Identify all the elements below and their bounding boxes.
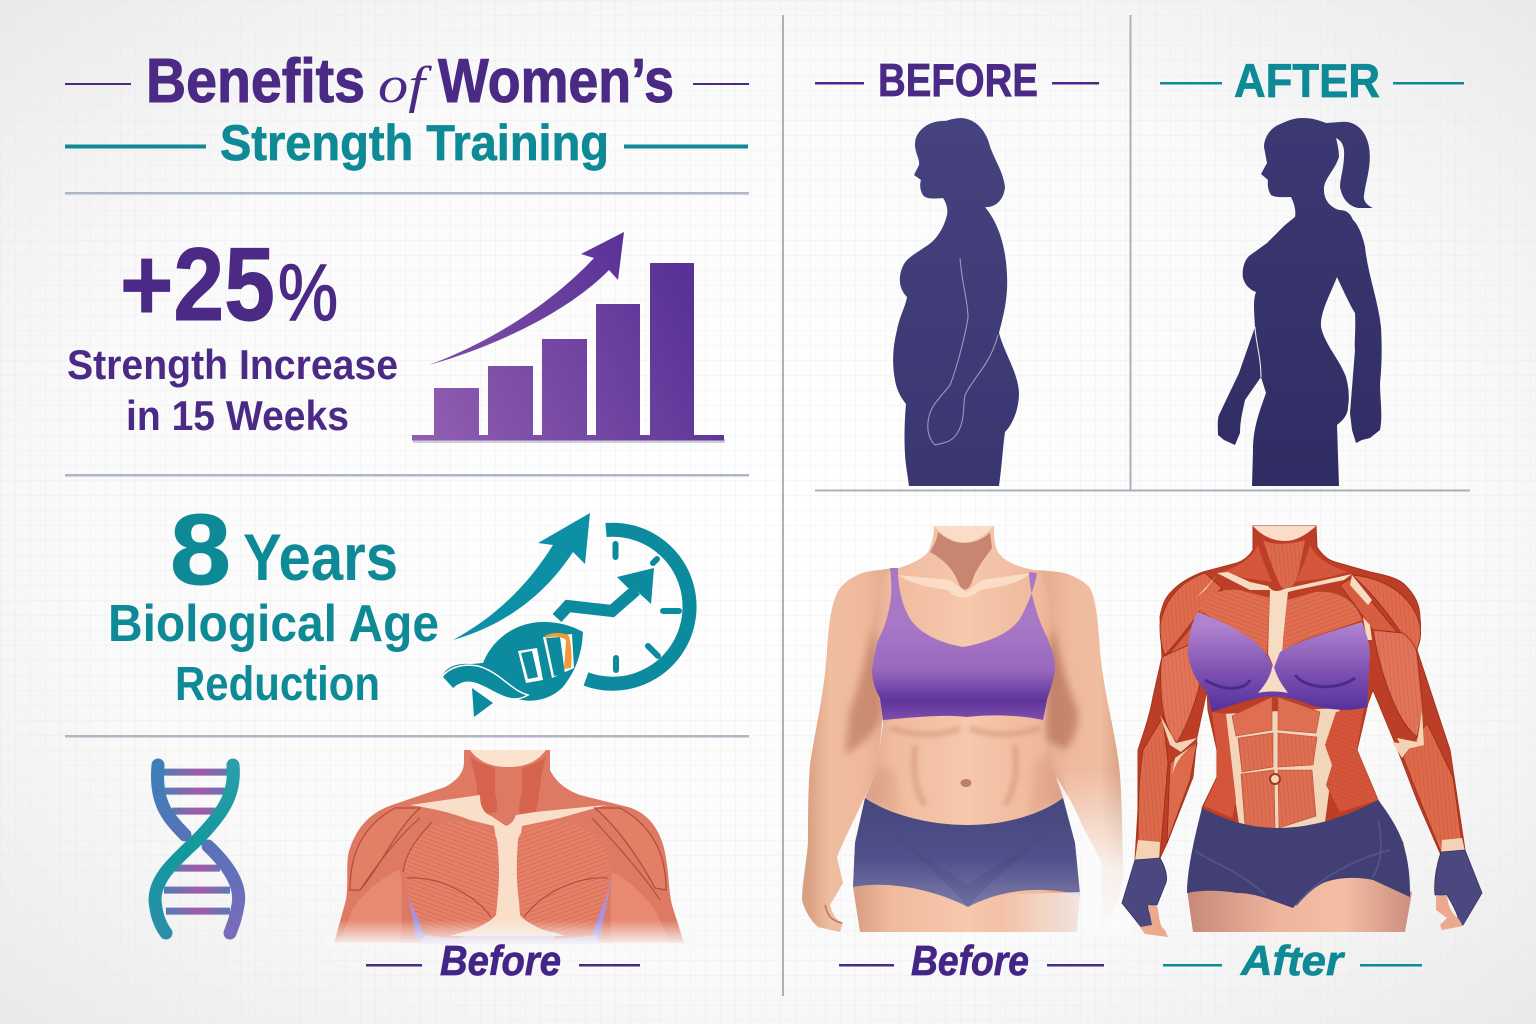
sports bra <box>1188 612 1370 712</box>
waist shading <box>865 750 1063 815</box>
chin cut <box>934 526 994 542</box>
bottom fade <box>325 920 695 946</box>
stat: +25% strength increase: Strength Increase <box>67 341 398 388</box>
collar and sternum tendons <box>1217 572 1352 672</box>
biceps <box>1161 643 1201 743</box>
label: before (body): Before <box>911 937 1029 984</box>
DNA leaf <box>442 622 583 701</box>
neck skin <box>470 750 546 767</box>
deltoids <box>1160 573 1222 655</box>
right arm and shoulder <box>1036 570 1123 930</box>
muscle base <box>1135 526 1465 860</box>
label: before (chest): Before <box>440 937 561 984</box>
label: after (body): After <box>1240 937 1346 984</box>
shorts <box>1187 800 1410 908</box>
figure: chest muscles before <box>325 750 695 946</box>
stat: 8 years biological age reduction <box>108 494 439 711</box>
abs fibers <box>1238 733 1317 828</box>
neck shading <box>930 532 992 590</box>
arrow: small <box>617 568 654 604</box>
bra tan cut-out <box>1258 662 1288 693</box>
abs <box>1232 697 1320 828</box>
left arm and shoulder <box>802 568 892 932</box>
neck skin <box>1253 526 1316 541</box>
rib and abs shading <box>890 728 1040 805</box>
navel <box>960 779 972 787</box>
panel: left column dividers <box>65 192 749 738</box>
DNA base pairs <box>518 648 543 683</box>
navel <box>1270 774 1280 784</box>
obliques <box>1204 712 1236 818</box>
sports bra <box>872 568 1055 720</box>
clock ring <box>557 530 690 684</box>
icon: DNA helix <box>155 765 239 933</box>
title line 1: Women’s <box>438 47 674 116</box>
title <box>65 47 749 171</box>
stat: +25% strength increase: +25 <box>120 227 275 343</box>
purple top under chest <box>405 880 611 940</box>
pectorals <box>404 822 499 933</box>
pectorals <box>1199 590 1270 654</box>
neck muscles <box>1263 540 1305 589</box>
title line 1: of <box>378 57 433 114</box>
right thigh fade <box>1000 892 1080 933</box>
arrow: growth <box>429 232 624 365</box>
right arm fade <box>1062 770 1132 935</box>
title line 2: Strength Training <box>220 115 609 171</box>
bra-side tendon <box>1363 617 1372 640</box>
shorts <box>853 798 1080 907</box>
silhouette: before <box>893 118 1019 486</box>
stat: +25% strength increase: in 15 Weeks <box>126 392 349 439</box>
fingers <box>1140 905 1168 937</box>
bra underfolds <box>1205 675 1355 688</box>
arm tendons <box>1135 710 1465 860</box>
stat: +25% strength increase <box>67 227 398 439</box>
silhouette: after <box>1218 118 1382 486</box>
muscles <box>1138 573 1463 857</box>
muscle fibres on limbs <box>1138 573 1222 857</box>
trapezius <box>1222 545 1348 582</box>
arrow: large teal <box>453 513 590 640</box>
hand detail <box>825 905 842 923</box>
stat: 8 years biological age reduction: Reduction <box>175 658 380 711</box>
front shoulders <box>1168 590 1222 655</box>
torso behind abs <box>1222 708 1340 830</box>
figure: body before <box>802 526 1132 935</box>
thighs <box>1187 875 1412 932</box>
collar highlight <box>898 573 1030 598</box>
deltoids and arms <box>350 808 420 890</box>
sternum and collar tendon <box>410 795 606 936</box>
bar chart with rising arrow <box>412 232 725 443</box>
stat: 8 years biological age reduction: Biological Age <box>108 595 439 653</box>
title line 2 <box>65 115 748 171</box>
stat: 8 years biological age reduction: 8 <box>170 494 231 606</box>
figure: body after, muscular <box>1122 526 1482 937</box>
icon: clock, DNA and arrows <box>442 513 690 717</box>
forearms <box>1138 717 1168 857</box>
title line 1 <box>65 47 749 116</box>
gloves <box>1122 858 1167 928</box>
rungs <box>162 772 230 911</box>
stat: 8 years biological age reduction: Years <box>243 520 398 594</box>
heading: before: BEFORE <box>878 54 1038 106</box>
panel: right column frame lines <box>782 15 1470 996</box>
neck muscles <box>470 757 546 815</box>
torso and neck <box>853 526 1080 932</box>
heading: after: AFTER <box>1234 54 1380 107</box>
title line 1: Benefits <box>146 47 365 116</box>
stat: +25% strength increase: % <box>278 248 338 337</box>
arm fold shadows <box>845 625 882 755</box>
